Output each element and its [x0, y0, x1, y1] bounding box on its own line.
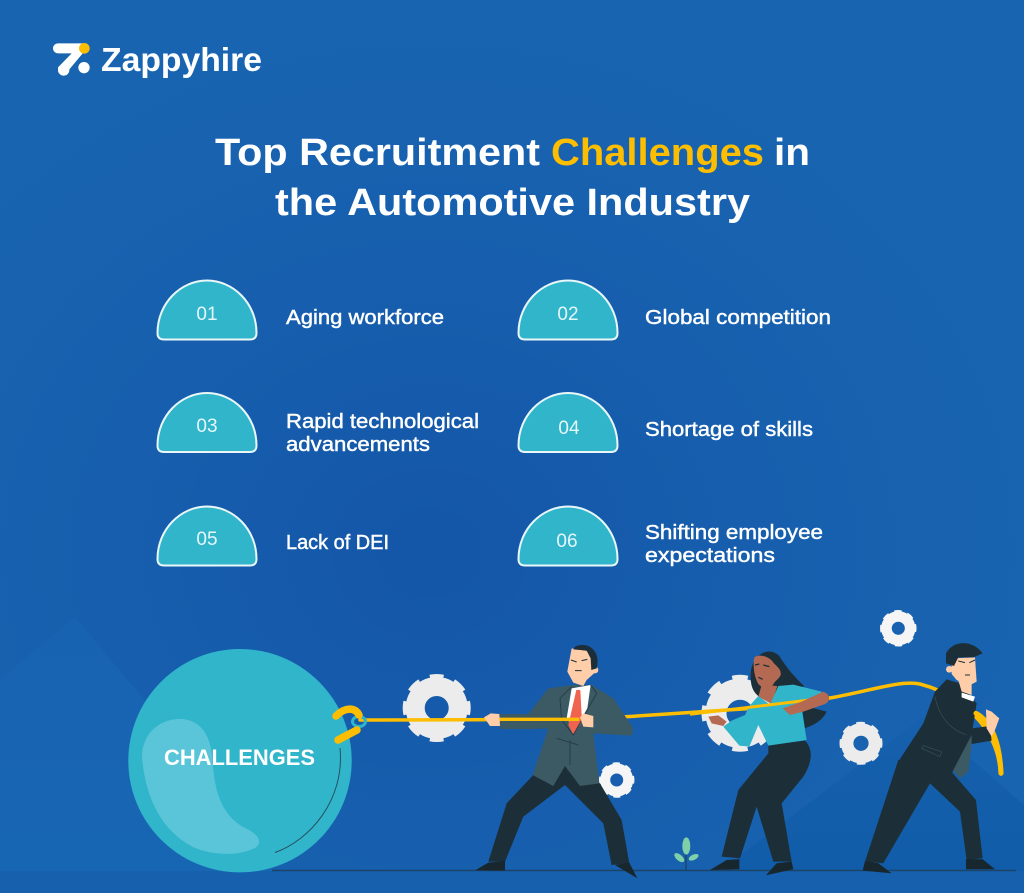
- plant: [673, 837, 700, 870]
- gear: middle right: [842, 724, 880, 762]
- back hair: [802, 705, 827, 728]
- trousers: [865, 760, 983, 863]
- challenge 06: Shifting employee: [645, 521, 823, 544]
- balloon shading arc: [275, 748, 340, 852]
- challenge 02: 02: [557, 304, 579, 325]
- challenge 01: 01: [196, 304, 218, 325]
- shoes: [475, 861, 637, 878]
- hair: [946, 643, 983, 666]
- challenge 05: [158, 506, 389, 566]
- gear: behind woman: [706, 679, 774, 747]
- title: Top Recruitment: [215, 132, 540, 174]
- rope: [360, 683, 1001, 773]
- balloon label: CHALLENGES: [164, 745, 315, 770]
- figure: woman: [690, 652, 830, 875]
- jacket: [899, 679, 977, 783]
- challenge 03: 03: [196, 416, 218, 437]
- jacket details: [922, 697, 967, 757]
- title: the Automotive Industry: [275, 182, 750, 224]
- challenge 05: 05: [196, 529, 218, 550]
- title: in: [774, 132, 810, 174]
- hair: [573, 645, 598, 670]
- balloon highlight: [142, 719, 259, 854]
- trousers: [488, 765, 629, 865]
- challenge 06: [518, 506, 823, 567]
- challenge 01: Aging workforce: [286, 306, 444, 329]
- challenge 05: Lack of DEI: [286, 531, 389, 554]
- collar: [962, 693, 975, 702]
- logo: Zappyhire: [53, 41, 262, 78]
- figure: man in dark suit: [863, 643, 1001, 873]
- face: [754, 656, 781, 690]
- title: Challenges: [551, 132, 764, 174]
- logo wordmark: Zappyhire: [101, 41, 262, 78]
- challenge 04: [518, 393, 813, 452]
- shoes: [863, 859, 995, 873]
- shoes: [710, 859, 793, 875]
- challenge 06: 06: [556, 531, 578, 552]
- head: [567, 648, 594, 686]
- balloon: challenges: [128, 649, 366, 872]
- rope over jacket: [499, 714, 579, 724]
- shirt: [567, 685, 591, 730]
- neck: [758, 685, 777, 704]
- rope over blouse: [690, 698, 830, 714]
- vest: [953, 733, 973, 778]
- challenge 03: Rapid technological: [286, 410, 479, 433]
- face features: [755, 664, 769, 679]
- holding hand: [986, 709, 999, 737]
- head: [952, 657, 977, 686]
- challenge 03: [158, 393, 479, 456]
- gear: large left: [407, 678, 467, 738]
- hands: [484, 713, 593, 727]
- ground line: [272, 870, 1016, 872]
- tie: [568, 690, 582, 735]
- rope end: [976, 713, 1001, 773]
- trousers: [722, 741, 811, 862]
- gear: small by first man: [601, 764, 632, 796]
- face features: [958, 660, 975, 675]
- blouse: [723, 685, 822, 747]
- challenge 04: 04: [558, 418, 580, 439]
- challenge 06: expectations: [645, 544, 775, 567]
- arms and hands: [708, 692, 829, 726]
- challenge 02: Global competition: [645, 306, 831, 329]
- face features: [571, 659, 587, 671]
- challenge 03: advancements: [286, 433, 430, 456]
- title: [215, 132, 810, 224]
- hook: [336, 709, 366, 740]
- gear: top right: [882, 612, 914, 644]
- jacket: [500, 685, 633, 786]
- challenge 04: Shortage of skills: [645, 418, 813, 441]
- icon: logo mark: [53, 43, 90, 76]
- figure: man in grey suit: [475, 645, 637, 878]
- challenge 02: [518, 280, 831, 340]
- hair: [751, 652, 804, 700]
- challenge 01: [158, 280, 444, 340]
- chin hand: [958, 680, 972, 695]
- rear arm: [972, 726, 992, 744]
- lapels: [557, 685, 597, 765]
